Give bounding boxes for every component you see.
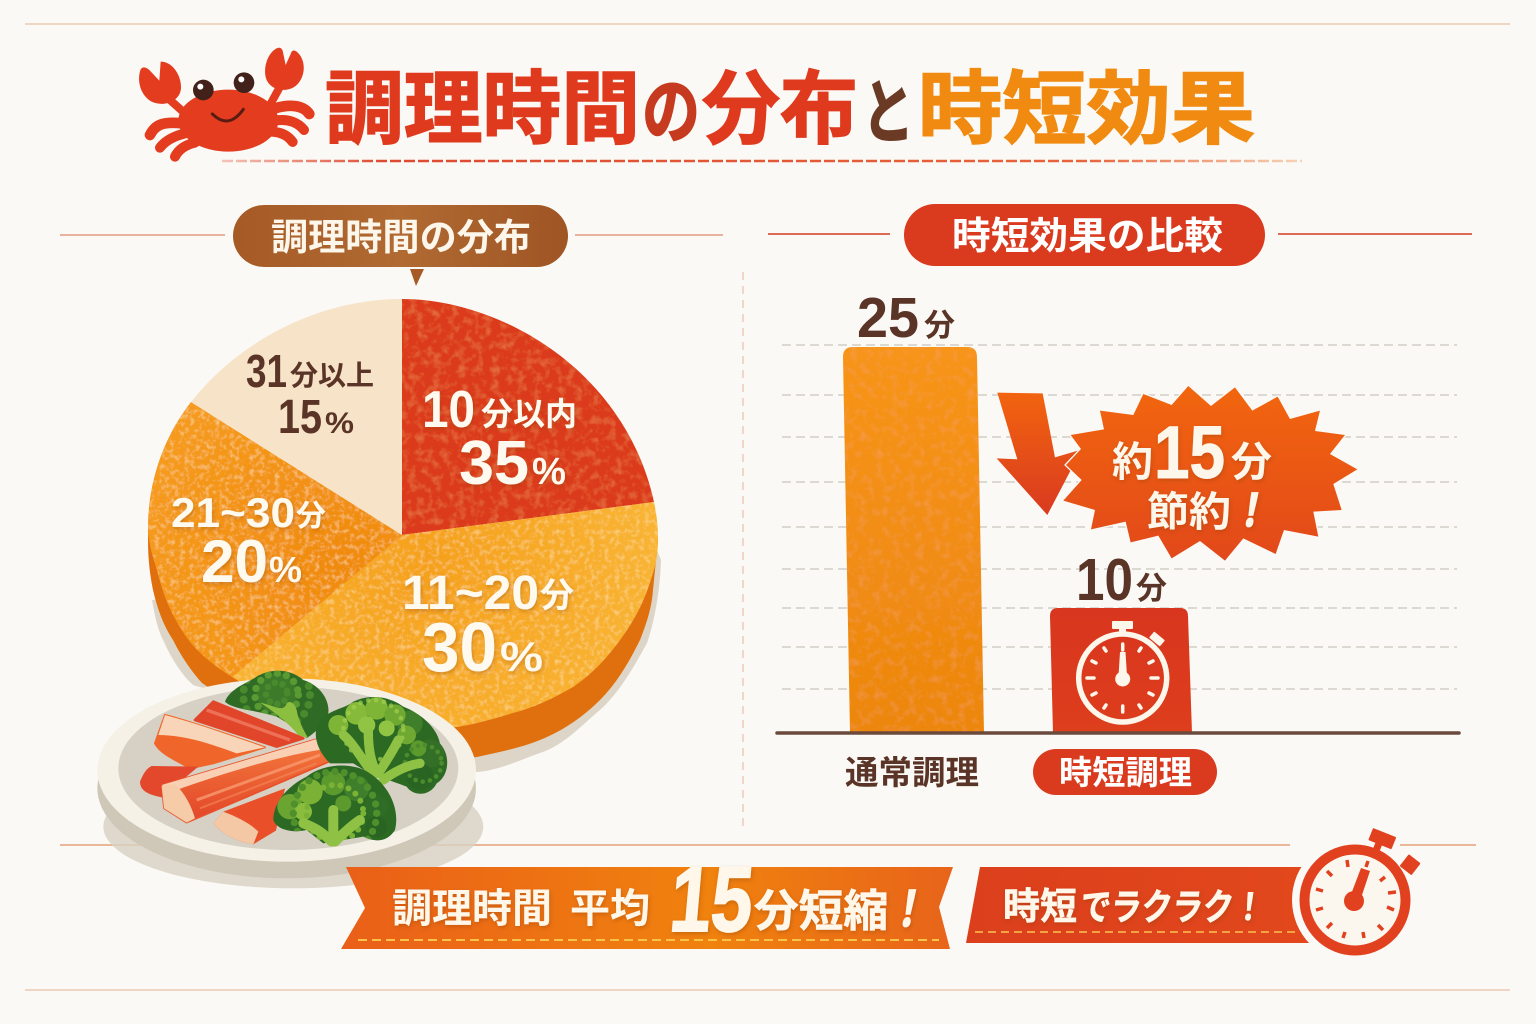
label: 31分以上 15%: 15 bbox=[278, 391, 322, 444]
callout: about 15 minutes saved: 15 bbox=[1154, 411, 1225, 494]
callout: about 15 minutes saved bbox=[1063, 386, 1357, 561]
label: 21~30分 20%: 分 bbox=[296, 500, 326, 533]
label: 10分以内 35% bbox=[422, 381, 577, 498]
banner: easy with time saving bbox=[966, 867, 1310, 943]
illustration: plate of crab sticks and broccoli bbox=[97, 662, 483, 888]
bar: 通常調理 25分 bbox=[843, 347, 984, 733]
label: 通常調理: 通常調理 bbox=[845, 754, 979, 791]
callout: about 15 minutes saved: ！ bbox=[1230, 487, 1273, 536]
crab stick: front main bbox=[162, 739, 329, 823]
bar: 時短調理 10分 bbox=[1050, 608, 1192, 733]
callout: about 15 minutes saved: 節約 bbox=[1147, 489, 1231, 535]
value: 25分 bbox=[857, 286, 955, 350]
label pill: 時短調理 bbox=[1033, 749, 1217, 795]
heading: cooking time distribution: 調理時間の分布 bbox=[271, 217, 531, 258]
bottom rule bbox=[60, 844, 1476, 846]
label: 21~30分 20%: % bbox=[269, 549, 302, 590]
label: 11~20分 30% bbox=[402, 567, 574, 686]
banner: average 15 minute reduction: 分短縮 bbox=[754, 887, 888, 936]
arrow: down arrow bbox=[997, 393, 1080, 515]
broccoli: right bbox=[316, 697, 447, 794]
callout: about 15 minutes saved: 約 bbox=[1112, 439, 1153, 485]
label: 11~20分 30%: 30 bbox=[422, 608, 497, 686]
broccoli: bottom bbox=[273, 766, 396, 855]
bar chart: time saving comparison bbox=[777, 286, 1459, 795]
slice: 31分以上 15% bbox=[191, 299, 402, 535]
banner: average 15 minute reduction bbox=[341, 848, 953, 951]
crab stick: lower bbox=[213, 788, 285, 844]
label: 21~30分 20%: 20 bbox=[201, 528, 268, 595]
banner: average 15 minute reduction: 15 bbox=[666, 848, 757, 951]
banner: average 15 minute reduction: 調理時間 bbox=[392, 887, 552, 931]
banner: average 15 minute reduction: ！ bbox=[886, 883, 932, 937]
banner: easy with time saving: でラクラク！ bbox=[1078, 886, 1267, 928]
slice: 21~30分 20% bbox=[148, 402, 402, 677]
label: 31分以上 15%: 分以上 bbox=[290, 360, 374, 391]
label pill: 時短調理: 時短調理 bbox=[1059, 754, 1192, 791]
title: の bbox=[642, 73, 700, 153]
title: 調理時間 bbox=[325, 65, 640, 154]
slice: 10分以内 35% bbox=[402, 299, 654, 535]
value: 25分: 25 bbox=[857, 286, 919, 350]
crab stick: left small bbox=[140, 766, 198, 797]
crab stick: pale bbox=[155, 715, 265, 768]
title: 時短効果 bbox=[918, 65, 1255, 154]
heading: cooking time distribution bbox=[60, 205, 723, 286]
crab stick: back bbox=[195, 702, 303, 747]
icon: red stopwatch bbox=[1292, 828, 1421, 963]
heading: time saving comparison bbox=[768, 204, 1472, 266]
banner: average 15 minute reduction: 平均 bbox=[570, 887, 650, 931]
label: 11~20分 30%: 分 bbox=[540, 577, 574, 615]
value: 25分: 分 bbox=[924, 308, 955, 343]
label: 31分以上 15%: 31 bbox=[246, 345, 287, 397]
label: 10分以内 35%: 10 bbox=[422, 381, 475, 439]
title bbox=[325, 65, 1255, 154]
label: 10分以内 35%: % bbox=[532, 451, 566, 493]
pie chart: cooking time distribution bbox=[148, 299, 661, 772]
title: 分布 bbox=[702, 65, 858, 154]
label: 11~20分 30%: % bbox=[500, 633, 543, 680]
banner: easy with time saving: 時短 bbox=[1003, 886, 1077, 927]
callout: about 15 minutes saved: 分 bbox=[1231, 439, 1272, 485]
label: 21~30分 20% bbox=[171, 489, 326, 595]
slice: 11~20分 30% bbox=[232, 502, 658, 729]
label: 10分以内 35%: 35 bbox=[459, 429, 529, 498]
value: 10分: 10 bbox=[1076, 547, 1133, 613]
label: 11~20分 30%: 11~20 bbox=[402, 567, 539, 620]
icon: crab mascot bbox=[139, 48, 309, 157]
title: と bbox=[862, 74, 914, 152]
label: 21~30分 20%: 21~30 bbox=[171, 489, 295, 536]
label: 31分以上 15%: % bbox=[325, 407, 354, 440]
label: 10分以内 35%: 分以内 bbox=[481, 396, 577, 432]
heading: time saving comparison: 時短効果の比較 bbox=[952, 216, 1223, 258]
value: 10分: 分 bbox=[1136, 571, 1167, 606]
label: 31分以上 15% bbox=[246, 345, 374, 444]
icon: stopwatch in bar bbox=[1079, 621, 1167, 722]
broccoli: top bbox=[225, 670, 328, 738]
